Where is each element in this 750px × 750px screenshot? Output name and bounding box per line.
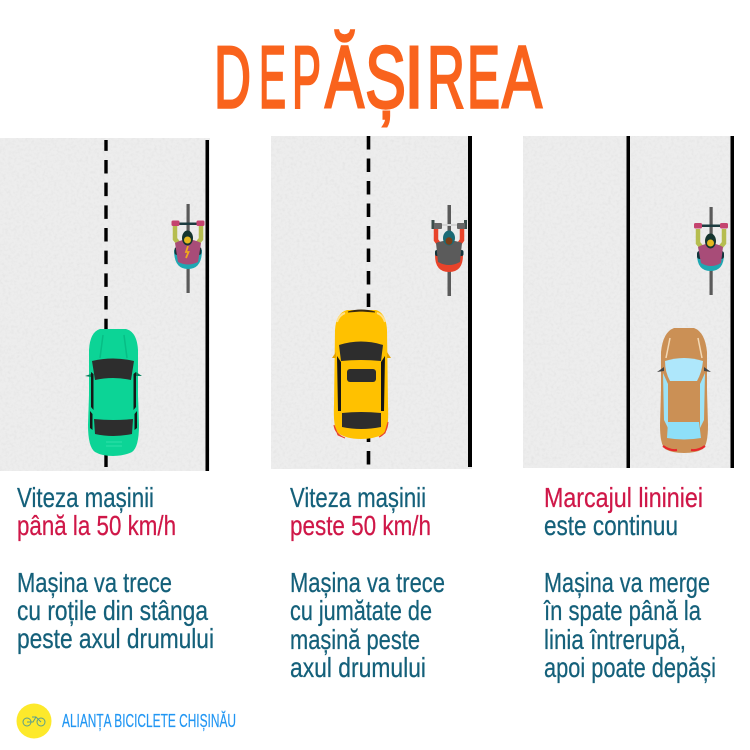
description: column 2: cu jumătate de [290, 595, 432, 626]
icon: cyclist with teal cape [694, 207, 728, 295]
solid road edge 1 [206, 140, 209, 471]
logo: Alianța Biciclete Chișinău [16, 704, 236, 738]
heading: column 1: până la 50 km/h [17, 510, 176, 541]
dashed road axis 2 [367, 136, 370, 466]
description: column 1: cu roțile din stânga [17, 595, 208, 626]
description: column 2: Mașina va trece [290, 567, 445, 598]
heading: column 1: Viteza mașinii [17, 482, 154, 513]
title [214, 28, 542, 126]
solid road axis 3 [626, 136, 630, 468]
description: column 3 [543, 567, 716, 683]
description: column 2 [290, 567, 445, 683]
heading: column 2: Viteza mașinii [290, 482, 426, 513]
road surface 1 [0, 138, 210, 471]
description: column 1 [17, 567, 214, 654]
road surface 3 [523, 136, 733, 468]
title: Ș [365, 28, 406, 126]
heading: column 2: peste 50 km/h [290, 510, 431, 541]
heading: column 3: Marcajul lininiei [544, 482, 703, 513]
road surface 2 [271, 136, 472, 469]
icon: yellow circle with bicycle [16, 704, 52, 738]
panel: road 1, dashed line, speed up to 50 km/h [0, 138, 210, 471]
title: A [502, 28, 542, 126]
title: R [427, 28, 465, 126]
title: E [259, 28, 286, 126]
text block: column 1 [17, 482, 214, 654]
panel: road 3, solid centre line [523, 136, 734, 468]
icon: cyclist with teal cape [172, 204, 204, 293]
title: D [214, 28, 251, 126]
description: column 3: linia întrerupă, [544, 624, 686, 655]
panel: road 2, dashed line, speed over 50 km/h [271, 136, 472, 469]
description: column 1: Mașina va trece [17, 567, 172, 598]
heading: column 1 [17, 482, 176, 541]
heading: column 3: este continuu [544, 510, 678, 541]
title: P [292, 28, 321, 126]
title: E [467, 28, 500, 126]
solid road edge 2 [468, 136, 472, 467]
description: column 1: peste axul drumului [17, 623, 214, 654]
dashed road axis 1 [104, 140, 108, 467]
solid road edge 3 [730, 136, 734, 468]
description: column 2: axul drumului [290, 652, 426, 683]
icon: cyclist with grey jacket [432, 205, 467, 296]
title: Ă [325, 28, 364, 126]
icon: brown car [657, 328, 711, 453]
organisation name: ALIANȚA BICICLETE CHIȘINĂU [62, 711, 236, 731]
description: column 2: mașină peste [290, 624, 420, 655]
text block: column 2 [290, 482, 445, 683]
title: I [404, 28, 424, 126]
heading: column 2 [290, 482, 431, 541]
heading: column 3 [544, 482, 703, 541]
icon: yellow taxi car [332, 310, 391, 439]
icon: green car [85, 329, 142, 456]
text block: column 3 [543, 482, 716, 683]
description: column 3: în spate până la [543, 595, 701, 626]
